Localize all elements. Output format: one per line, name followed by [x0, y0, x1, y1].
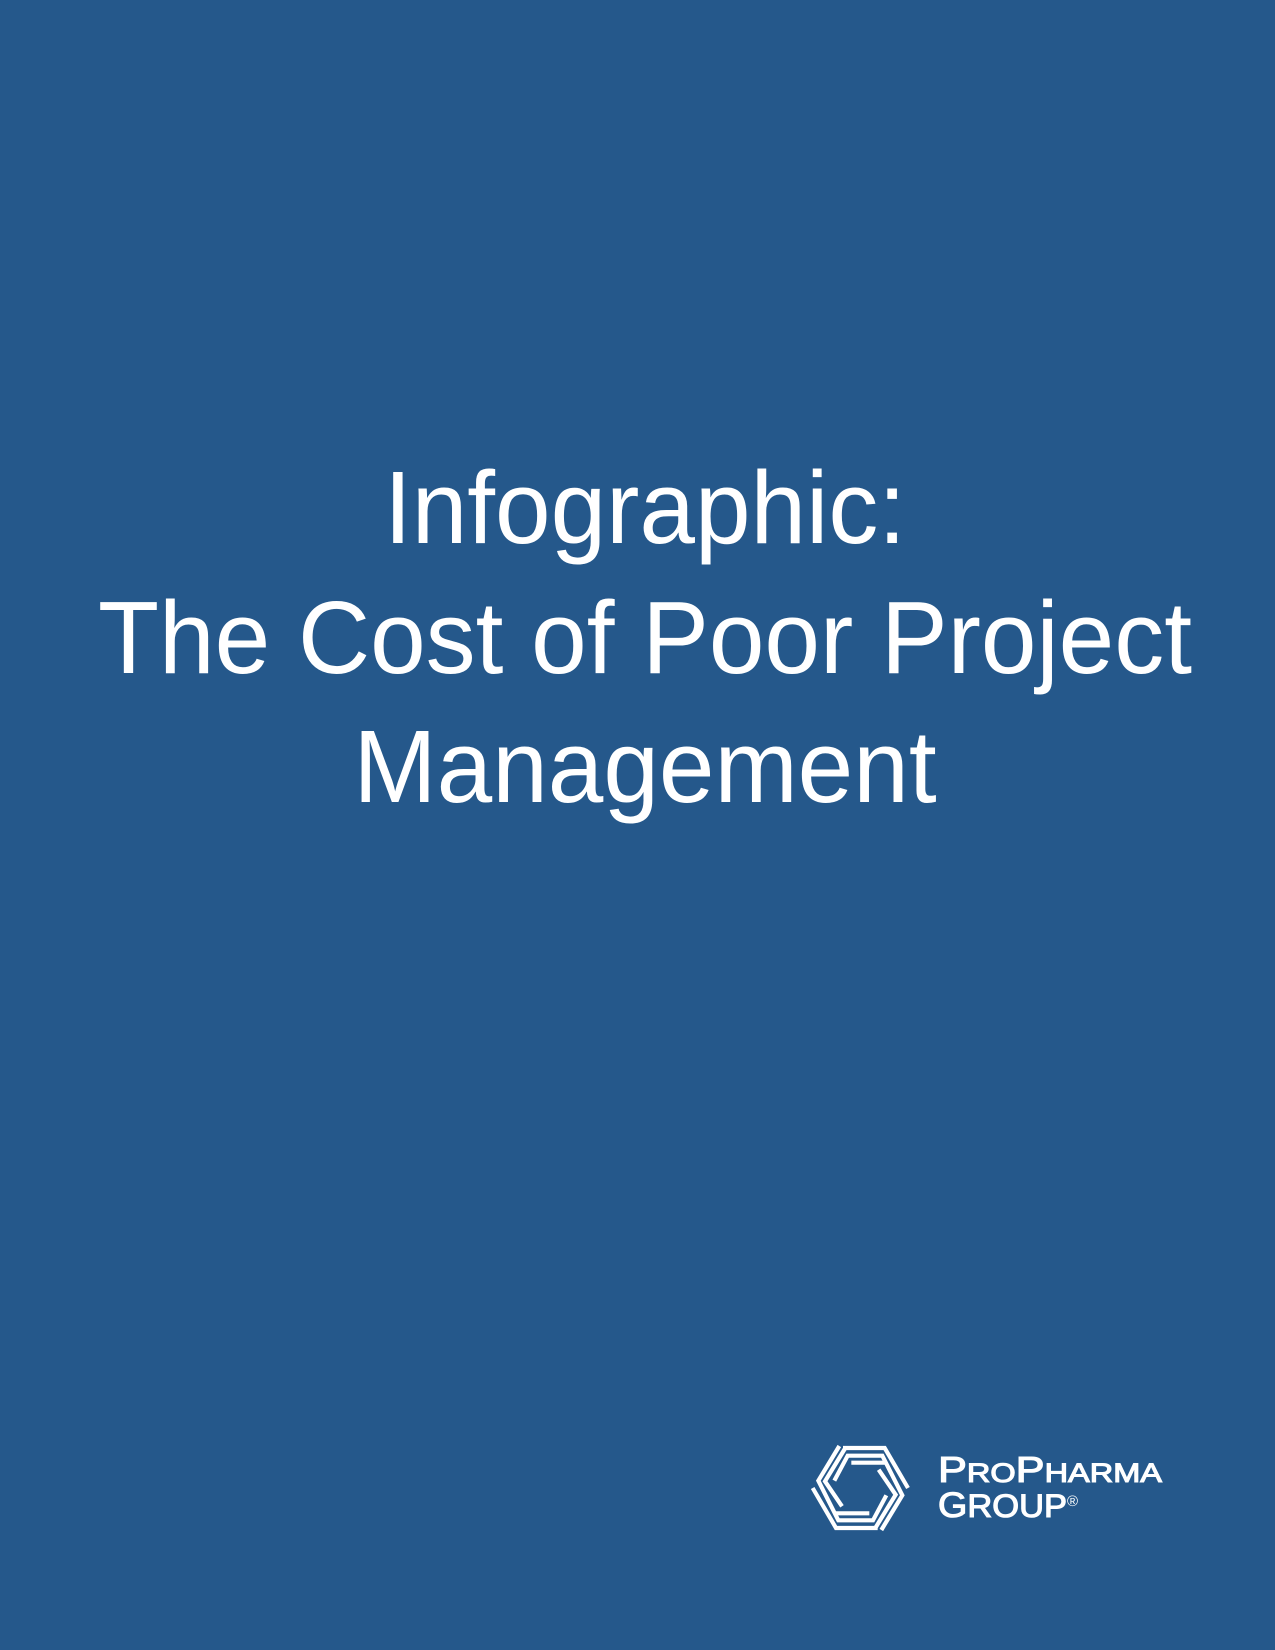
wordmark line 2: GROUP — [938, 1486, 1067, 1525]
title line 1: Infographic: — [384, 450, 906, 565]
registered mark: ® — [1067, 1493, 1078, 1510]
title line 2: The Cost of Poor Project — [98, 580, 1192, 695]
title line 3: Management — [353, 709, 937, 824]
icon: hexagon mark — [813, 1446, 908, 1530]
wordmark — [938, 1449, 1162, 1525]
wordmark line 1: PROPHARMA — [938, 1449, 1162, 1490]
title — [98, 450, 1192, 824]
logo: ProPharma Group — [810, 1444, 1163, 1532]
